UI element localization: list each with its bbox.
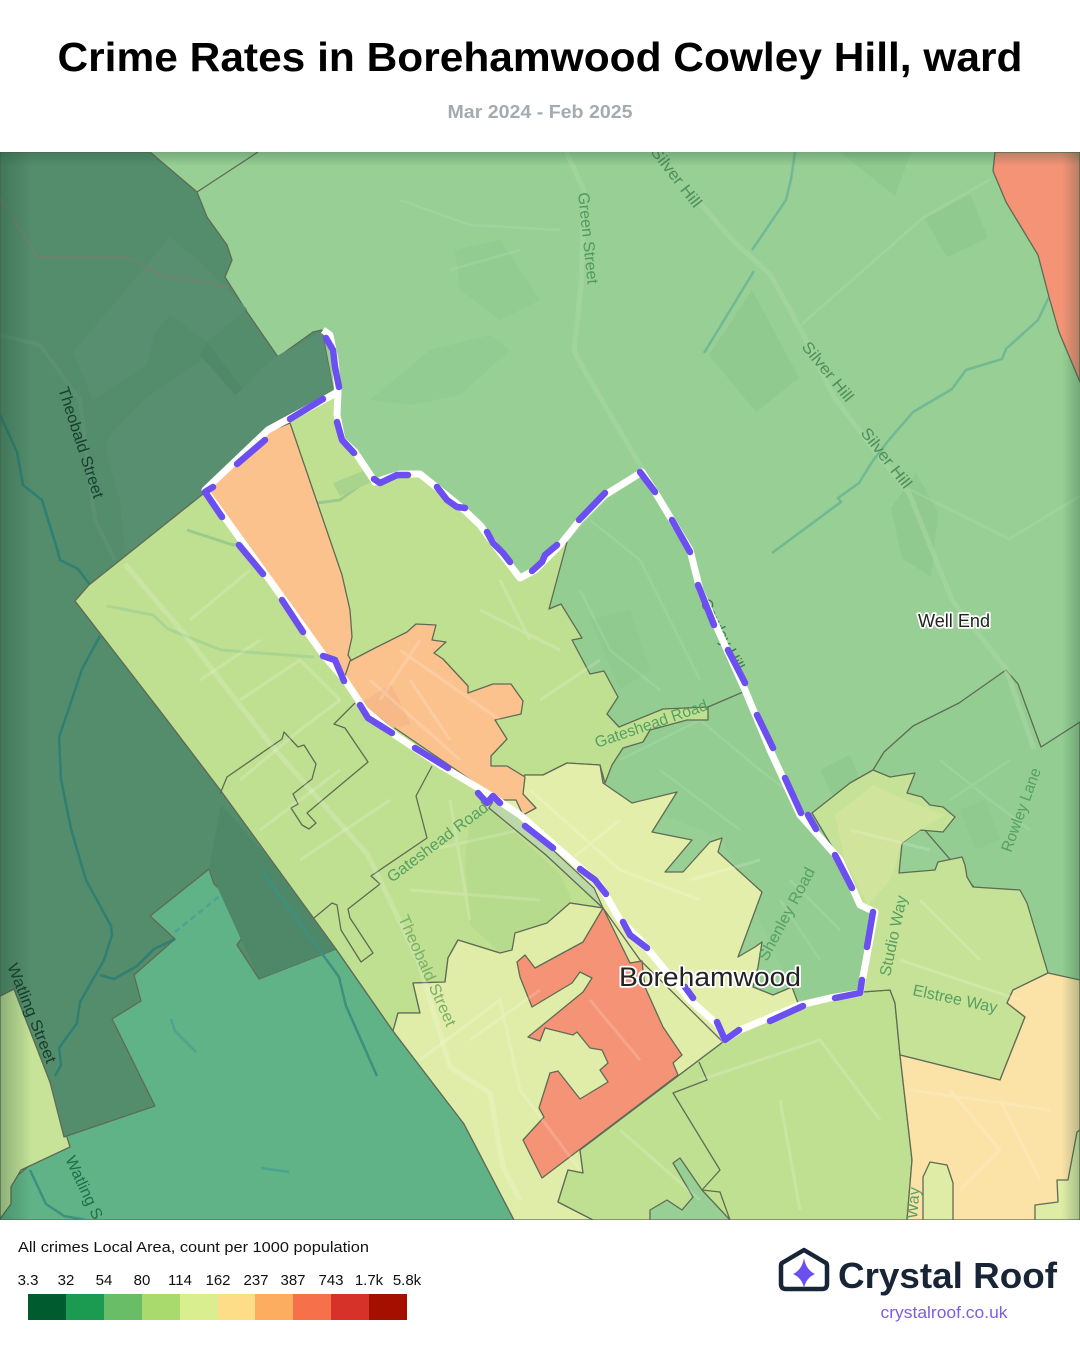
street labels <box>3 144 1045 1222</box>
pale neighbourhood south of centre <box>393 903 723 1220</box>
legend values: 114 <box>168 1272 192 1289</box>
date range subtitle: Mar 2024 - Feb 2025 <box>448 101 632 122</box>
street labels: Theobald Street <box>394 913 459 1030</box>
orange neighbourhood north of ward <box>208 423 352 682</box>
legend values: 54 <box>96 1272 112 1289</box>
pale neighbourhood across ward <box>489 763 798 1042</box>
logo wordmark: Crystal Roof <box>838 1255 1058 1296</box>
darker orange block <box>364 686 410 728</box>
west streams <box>0 415 377 1220</box>
title: Crime Rates in Borehamwood Cowley Hill, ward <box>58 34 1022 80</box>
street labels: Watling S <box>61 1154 105 1222</box>
teal neighbourhood south-west <box>0 869 514 1220</box>
legend values: 5.8k <box>393 1272 422 1289</box>
legend values: 387 <box>280 1272 306 1289</box>
legend title: All crimes Local Area, count per 1000 population <box>18 1239 369 1256</box>
place label: Well End: Well End <box>918 611 990 631</box>
street labels: Gateshead Road <box>593 697 710 752</box>
legend values: 32 <box>58 1272 74 1289</box>
street labels: Green Street <box>574 192 601 285</box>
legend <box>18 1239 422 1320</box>
green field patch <box>333 470 372 496</box>
internal area boundaries <box>220 692 743 962</box>
yellow neighbourhood south-east <box>900 973 1080 1220</box>
railway strip <box>489 798 603 908</box>
inner south boundary <box>673 1062 730 1220</box>
street labels: Rowley Lane <box>999 766 1045 854</box>
street labels: Watling Street <box>3 961 59 1066</box>
ward boundary purple dashes <box>205 338 873 1040</box>
street labels: Silver Hill <box>857 425 915 492</box>
street labels: Gateshead Road <box>384 799 492 886</box>
reddish boundary track <box>0 199 230 287</box>
green patch south <box>650 1158 730 1220</box>
south-west light green strip <box>0 989 70 1219</box>
map edge shading <box>0 152 1080 1220</box>
street label under ward line: Cowley Hill: Cowley Hill <box>696 596 747 673</box>
east and ward neighbourhood shade <box>872 670 1080 980</box>
icon: house with star <box>781 1250 827 1289</box>
pale pockets in yellow area <box>923 1130 1080 1220</box>
choropleth map <box>0 144 1080 1222</box>
north-east hot-spot neighbourhood <box>993 152 1080 382</box>
street labels: Elstree Way <box>911 982 999 1017</box>
ward boundary white line <box>205 330 875 1040</box>
base area: low crime north and east <box>0 152 1080 1220</box>
street labels: Way <box>904 1187 924 1219</box>
legend values: 162 <box>205 1272 231 1289</box>
place label: Borehamwood: Borehamwood <box>619 962 801 992</box>
legend values: 237 <box>243 1272 269 1289</box>
minor roads north and east <box>400 179 1080 960</box>
logo: Crystal Roof <box>781 1250 1058 1322</box>
legend values <box>18 1272 422 1289</box>
subtle woodland patches <box>370 152 1000 850</box>
legend values: 1.7k <box>355 1272 384 1289</box>
street labels: Theobald Street <box>54 385 106 501</box>
east pale top patch <box>835 785 945 905</box>
street labels: Silver Hill <box>647 144 705 211</box>
dark green neighbourhood west <box>0 152 336 1137</box>
logo url: crystalroof.co.uk <box>880 1304 1008 1322</box>
light green neighbourhood inside and west of ward <box>75 392 708 1031</box>
north boundary line <box>197 152 258 192</box>
street labels: Silver Hill <box>798 339 856 405</box>
red neighbourhood centre-south <box>517 908 682 1178</box>
green neighbourhood south of ward <box>558 990 912 1220</box>
darker mid-green patch <box>465 808 572 953</box>
stream through ward <box>186 488 359 546</box>
streets in the built-up area <box>125 564 1050 1210</box>
street labels: Shenley Road <box>756 865 819 964</box>
legend colour scale <box>28 1294 407 1320</box>
legend values: 3.3 <box>18 1272 38 1289</box>
major roads north <box>566 152 1034 749</box>
east light neighbourhood <box>812 770 1048 1080</box>
street labels: Studio Way <box>877 894 911 978</box>
legend values: 80 <box>134 1272 150 1289</box>
stream west of ward <box>107 606 314 657</box>
dark region shading <box>0 237 336 979</box>
streams north-east <box>704 152 1080 553</box>
orange neighbourhood central <box>343 624 536 815</box>
legend values: 743 <box>318 1272 344 1289</box>
